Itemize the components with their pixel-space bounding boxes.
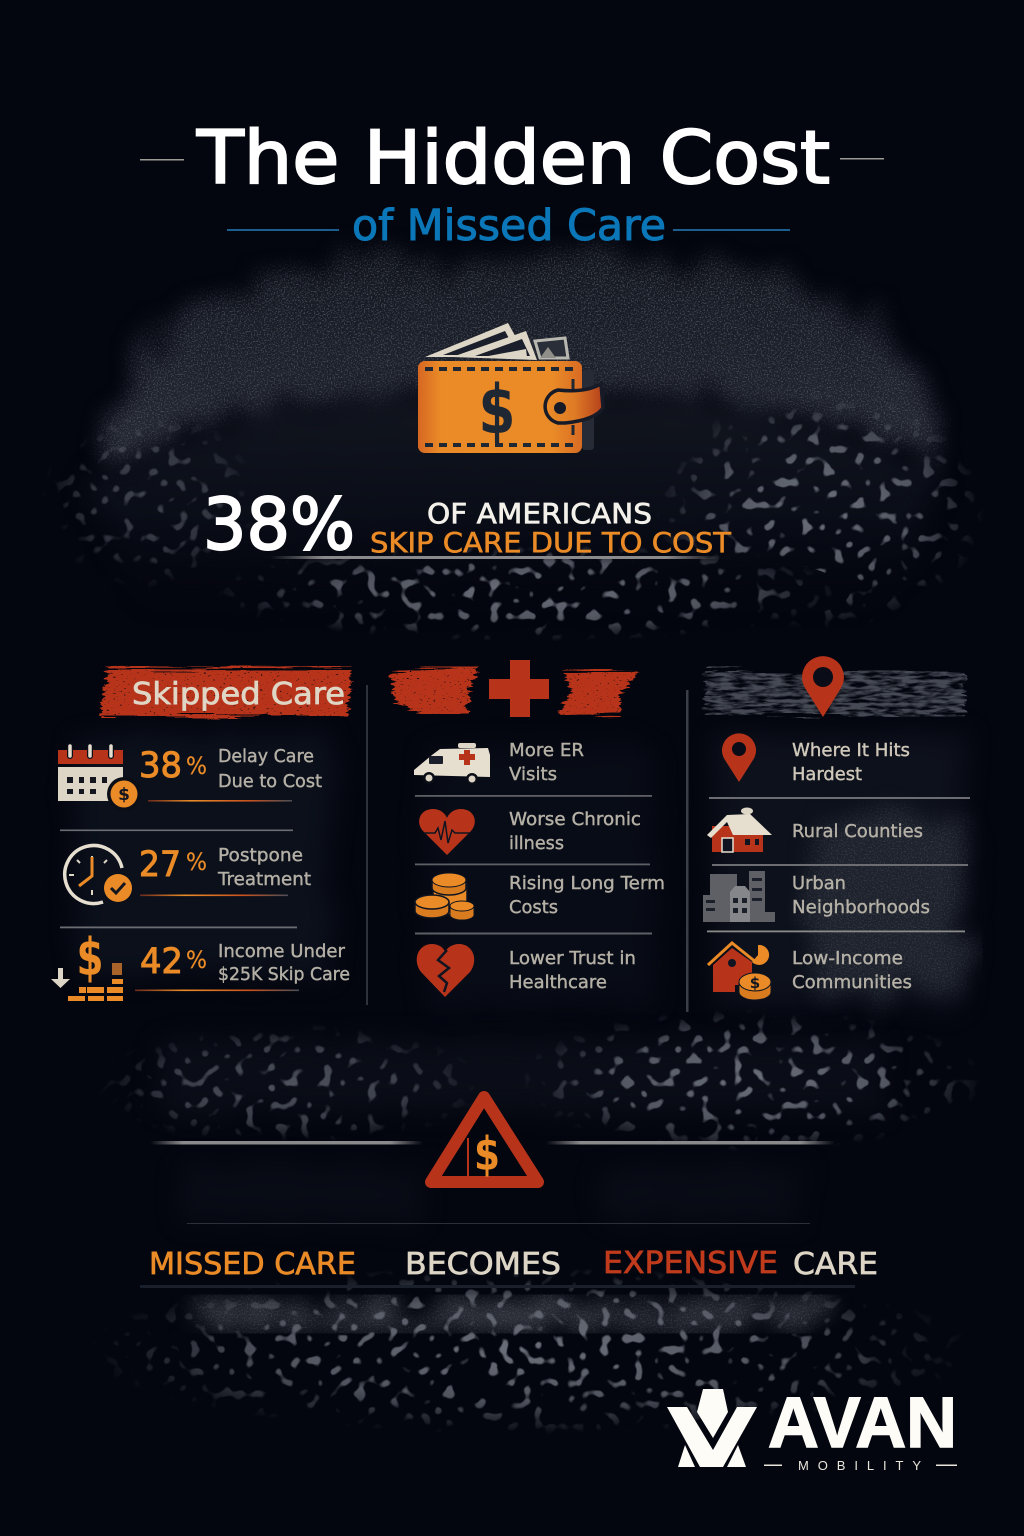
row: worse chronic illness: illness bbox=[509, 833, 564, 854]
headline statistic bbox=[203, 483, 732, 566]
heading banner: medical cross bbox=[391, 660, 640, 717]
stat: 42 percent: $25K Skip Care bbox=[218, 964, 350, 985]
stat label line 2: SKIP CARE DUE TO COST bbox=[370, 526, 732, 559]
row: rising long term costs: Rising Long Term bbox=[509, 873, 665, 894]
row: low-income communities bbox=[792, 948, 912, 993]
icon: low income house with coin: $ bbox=[750, 974, 760, 992]
stat: 38 percent bbox=[139, 746, 322, 802]
heading banner: skipped care: Skipped Care bbox=[132, 677, 345, 712]
stat: 27 percent: Treatment bbox=[217, 869, 311, 890]
subtitle: of Missed Care bbox=[352, 201, 666, 251]
stat: 42 percent: Income Under bbox=[218, 941, 346, 962]
stat: 42 percent bbox=[135, 941, 350, 991]
icon: wallet with cash bbox=[418, 323, 603, 453]
title: The Hidden Cost bbox=[196, 116, 830, 201]
icon: falling income: $ bbox=[76, 928, 104, 988]
heading banner: map pin bbox=[705, 656, 965, 717]
title block bbox=[140, 116, 884, 251]
stat: 27 percent bbox=[139, 845, 311, 896]
icon: ambulance bbox=[414, 743, 490, 785]
stat: 42 percent: 42 bbox=[140, 942, 183, 982]
row: rising long term costs bbox=[509, 873, 665, 918]
panel: where it hits hardest bbox=[703, 656, 970, 1000]
row: worse chronic illness bbox=[509, 809, 641, 854]
logo: avan mobility bbox=[667, 1384, 957, 1473]
icon: falling income bbox=[51, 928, 123, 1001]
warning sign divider bbox=[150, 1097, 835, 1182]
panel: health consequences bbox=[391, 660, 665, 997]
panel: skipped care bbox=[51, 668, 351, 1001]
row: lower trust in healthcare bbox=[509, 948, 636, 993]
row: where it hits hardest: Where It Hits bbox=[792, 740, 910, 761]
stat label line 1: OF AMERICANS bbox=[427, 497, 652, 530]
row: where it hits hardest bbox=[792, 740, 910, 785]
icon: small map pin bbox=[722, 733, 756, 782]
stat: 38 percent: Delay Care bbox=[218, 746, 314, 767]
row: worse chronic illness: Worse Chronic bbox=[509, 809, 641, 830]
row: more er visits: Visits bbox=[509, 764, 557, 785]
icon: city buildings bbox=[703, 871, 775, 922]
stat: 42 percent: % bbox=[186, 946, 207, 974]
row: rural counties: Rural Counties bbox=[792, 821, 923, 842]
conclusion statement bbox=[140, 1223, 878, 1288]
heading banner: skipped care bbox=[100, 668, 351, 716]
wallet strap bbox=[545, 384, 603, 423]
conclusion statement: MISSED CARE bbox=[149, 1247, 356, 1282]
icon: warning triangle bbox=[431, 1097, 538, 1182]
stat: 38 percent: 38 bbox=[139, 746, 182, 786]
stat: 27 percent: 27 bbox=[139, 845, 181, 885]
stat: 38 percent: Due to Cost bbox=[218, 771, 322, 792]
logo mark bbox=[667, 1389, 757, 1467]
icon: broken heart bbox=[417, 944, 474, 997]
column panel backgrounds bbox=[76, 685, 965, 1012]
row: urban neighborhoods bbox=[792, 873, 930, 918]
icon: low income house with coin bbox=[708, 943, 771, 1000]
row: where it hits hardest: Hardest bbox=[792, 764, 862, 785]
icon: clock with check bbox=[65, 846, 132, 904]
logo wordmark: AVAN bbox=[768, 1384, 957, 1463]
icon: heart with pulse bbox=[419, 809, 475, 855]
icon: calendar with coin: $ bbox=[118, 785, 130, 805]
row: low-income communities: Communities bbox=[792, 972, 912, 993]
icon: rural house bbox=[707, 808, 772, 852]
row: low-income communities: Low-Income bbox=[792, 948, 903, 969]
stat: 38 percent: % bbox=[186, 752, 207, 780]
row: lower trust in healthcare: Lower Trust in bbox=[509, 948, 636, 969]
row: more er visits bbox=[509, 740, 584, 785]
conclusion statement: BECOMES bbox=[405, 1247, 561, 1282]
row: rising long term costs: Costs bbox=[509, 897, 558, 918]
stat: 27 percent: Postpone bbox=[218, 845, 303, 866]
conclusion statement: CARE bbox=[793, 1247, 878, 1282]
background texture: grunge haze and speckles bbox=[57, 236, 974, 1433]
stat: 27 percent: % bbox=[186, 848, 207, 876]
conclusion statement: EXPENSIVE bbox=[603, 1246, 778, 1281]
row: urban neighborhoods: Neighborhoods bbox=[792, 897, 930, 918]
icon: warning triangle: $ bbox=[474, 1127, 500, 1181]
wallet dollar sign: $ bbox=[478, 371, 516, 450]
row: more er visits: More ER bbox=[509, 740, 584, 761]
icon: coin stacks bbox=[415, 873, 474, 920]
row: lower trust in healthcare: Healthcare bbox=[509, 972, 607, 993]
icon: calendar with coin bbox=[58, 746, 141, 811]
logo tagline: MOBILITY bbox=[798, 1458, 921, 1473]
big number: 38% bbox=[203, 483, 355, 566]
row: urban neighborhoods: Urban bbox=[792, 873, 846, 894]
